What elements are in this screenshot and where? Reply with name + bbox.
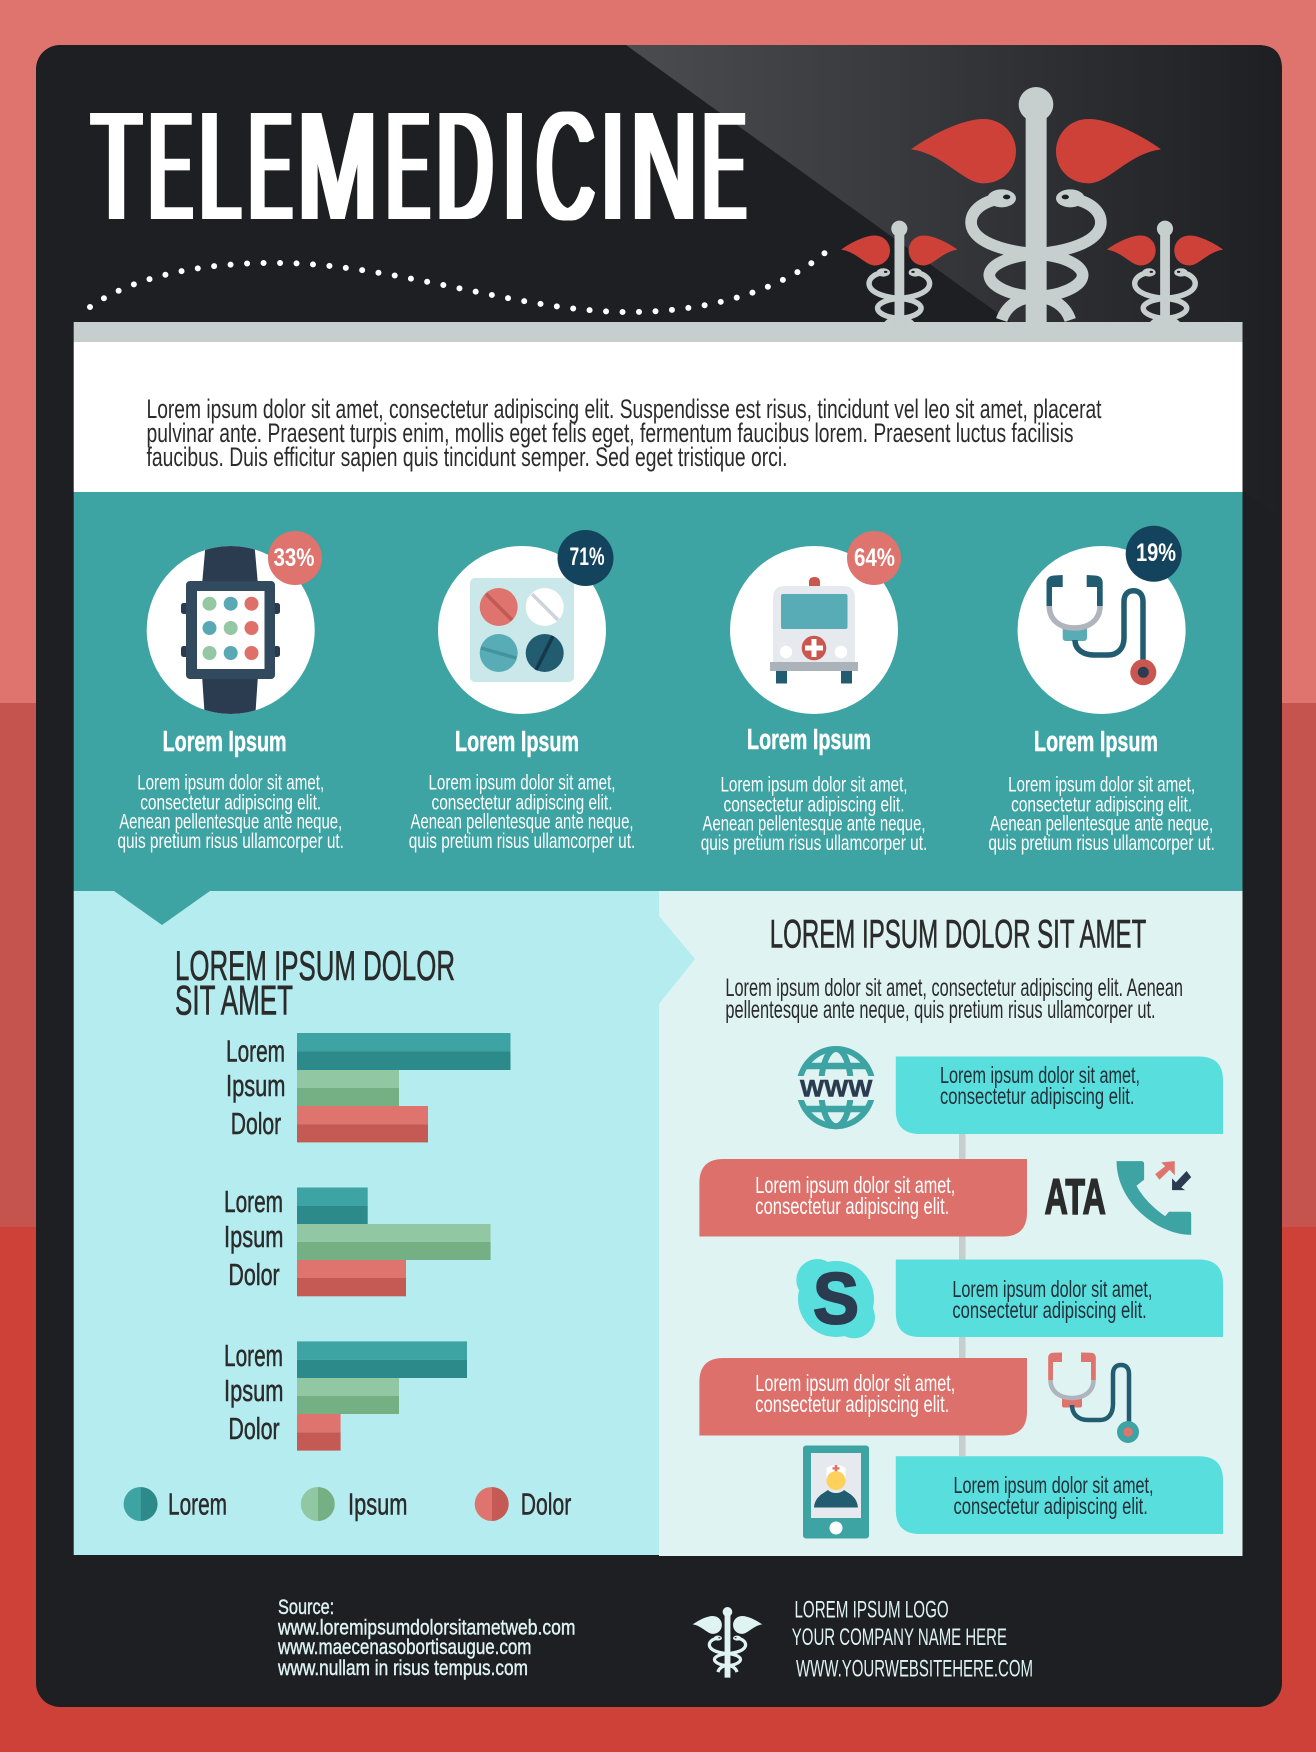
chart heading: SIT AMET [175, 976, 293, 1024]
stat column 3: ambulance [701, 531, 927, 855]
info pill 4: consectetur adipiscing elit. [755, 1391, 949, 1417]
bar group 1 [226, 1033, 510, 1142]
bar group 3: Dolor [228, 1411, 280, 1446]
description: Aenean pellentesque ante neque, [119, 811, 342, 834]
footer company [792, 1597, 1033, 1683]
description: quis pretium risus ullamcorper ut. [988, 832, 1215, 855]
panel: teal statistics [74, 492, 1243, 891]
stat column 1: smartwatch [117, 531, 344, 853]
info pill 4 [699, 1358, 1027, 1436]
description: quis pretium risus ullamcorper ut. [409, 830, 635, 853]
info pill 4: Lorem ipsum dolor sit amet, [755, 1370, 955, 1396]
panel: right channels [699, 913, 1223, 1538]
intro text [146, 394, 1102, 472]
description [988, 774, 1215, 855]
icon: skype: S [813, 1260, 859, 1340]
badge 71%: 71% [570, 543, 604, 571]
title: E [250, 80, 291, 252]
icon: stethoscope small [1048, 1352, 1139, 1443]
description [117, 772, 344, 853]
description [409, 772, 635, 853]
icon: stethoscope [1046, 575, 1156, 685]
description: Aenean pellentesque ante neque, [702, 813, 926, 836]
info pill 2: consectetur adipiscing elit. [755, 1193, 949, 1219]
bar group 2: Ipsum [224, 1219, 284, 1254]
bar group 3 [224, 1338, 467, 1451]
description [701, 774, 927, 855]
badge 71% [558, 530, 614, 586]
bar group 1: Ipsum [226, 1068, 286, 1103]
badge 64%: 64% [854, 544, 895, 572]
bar group 3: Lorem [224, 1338, 283, 1373]
heading: Lorem Ipsum [455, 726, 579, 758]
icon: footer caduceus logo [693, 1607, 762, 1678]
info pill 3: consectetur adipiscing elit. [952, 1297, 1147, 1323]
description: Lorem ipsum dolor sit amet, [137, 772, 324, 794]
footer company: YOUR COMPANY NAME HERE [792, 1624, 1007, 1651]
bar group 2: Lorem [224, 1184, 283, 1219]
title: C [537, 80, 594, 252]
chart heading [175, 942, 455, 1024]
description: consectetur adipiscing elit. [1011, 794, 1192, 816]
title: T [92, 80, 141, 252]
icon: caduceus small left [841, 221, 958, 338]
icon: pill blister [470, 578, 574, 682]
panel: right channels background [659, 891, 1242, 1556]
description: Aenean pellentesque ante neque, [990, 813, 1213, 836]
chart legend: Lorem [168, 1486, 227, 1522]
title: E [150, 80, 192, 252]
description: Lorem ipsum dolor sit amet, [1008, 774, 1195, 796]
title: L [200, 80, 240, 252]
title: N [632, 80, 696, 252]
chart heading: LOREM IPSUM DOLOR [175, 942, 455, 989]
text: E [704, 80, 745, 252]
description: Lorem ipsum dolor sit amet, [428, 772, 616, 794]
chart legend: Dolor [521, 1486, 571, 1522]
description: consectetur adipiscing elit. [140, 792, 321, 814]
bar group 3: Ipsum [224, 1373, 284, 1408]
info pill 5: Lorem ipsum dolor sit amet, [954, 1472, 1154, 1498]
stat column 2: pills [409, 530, 635, 853]
icon: skype [796, 1259, 875, 1340]
description: consectetur adipiscing elit. [432, 792, 612, 814]
title: D [437, 80, 492, 252]
grey shelf bar [74, 322, 1243, 342]
panel: intro [74, 342, 1243, 492]
arrow: teal pointer down [114, 891, 210, 925]
badge 64% [847, 531, 901, 585]
footer company: WWW.YOURWEBSITEHERE.COM [796, 1656, 1033, 1683]
timeline connector [959, 1134, 966, 1456]
title: E [387, 80, 429, 252]
dotted wave [90, 252, 826, 312]
footer sources: www.maecenasobortisaugue.com [277, 1636, 531, 1659]
heading: Lorem Ipsum [747, 724, 871, 756]
badge 33%: 33% [274, 544, 314, 572]
footer company: LOREM IPSUM LOGO [794, 1597, 949, 1624]
title: M [298, 80, 377, 252]
icon: smartwatch [181, 540, 280, 720]
badge 33% [268, 531, 322, 585]
icon: www globe: WWW [800, 1076, 873, 1103]
info pill 1: Lorem ipsum dolor sit amet, [940, 1062, 1140, 1088]
bar chart [224, 1033, 510, 1451]
icon: caduceus large [911, 87, 1161, 340]
footer sources: www.nullam in risus tempus.com [277, 1657, 528, 1680]
section description [725, 974, 1183, 1024]
chart legend [124, 1486, 571, 1522]
description: Aenean pellentesque ante neque, [410, 811, 634, 834]
icon: caduceus small right [1107, 221, 1223, 338]
ATA label: ATA [1045, 1169, 1106, 1225]
info pill 3: Lorem ipsum dolor sit amet, [952, 1276, 1152, 1302]
description: Lorem ipsum dolor sit amet, [720, 774, 908, 796]
info pill 2 [699, 1159, 1027, 1236]
icon: tablet with nurse [803, 1446, 869, 1538]
footer sources [277, 1596, 575, 1680]
title: I [504, 80, 525, 252]
heading: Lorem Ipsum [1034, 726, 1158, 758]
panel: left bar chart [74, 891, 695, 1555]
bar group 2: Dolor [228, 1257, 280, 1292]
description: quis pretium risus ullamcorper ut. [117, 830, 344, 853]
info pill 1: consectetur adipiscing elit. [940, 1083, 1134, 1109]
icon: phone with arrows [1117, 1161, 1191, 1235]
stat column 4: stethoscope [988, 526, 1215, 855]
description: consectetur adipiscing elit. [724, 794, 904, 816]
description: quis pretium risus ullamcorper ut. [701, 832, 927, 855]
title: I [602, 80, 623, 252]
bar group 1: Lorem [226, 1033, 285, 1068]
info pill 5 [896, 1456, 1223, 1534]
info pill 3 [896, 1260, 1223, 1337]
icon: www globe [799, 1049, 873, 1126]
footer sources: www.loremipsumdolorsitametweb.com [277, 1616, 575, 1639]
bar group 2 [224, 1184, 491, 1296]
footer sources: Source: [278, 1596, 334, 1619]
heading: Lorem Ipsum [163, 726, 287, 758]
bar group 1: Dolor [231, 1106, 281, 1141]
intro text: faucibus. Duis efficitur sapien quis tincidunt semper. Sed eget tristique orci. [146, 442, 788, 472]
icon: ambulance [770, 577, 858, 684]
info pill 5: consectetur adipiscing elit. [954, 1493, 1148, 1519]
arrow: light blue pointer right [659, 916, 695, 1004]
info pill 1 [896, 1056, 1223, 1134]
info pill 2: Lorem ipsum dolor sit amet, [755, 1172, 955, 1198]
badge 19% [1126, 526, 1182, 582]
chart legend: Ipsum [348, 1486, 408, 1522]
badge 19%: 19% [1136, 539, 1176, 567]
